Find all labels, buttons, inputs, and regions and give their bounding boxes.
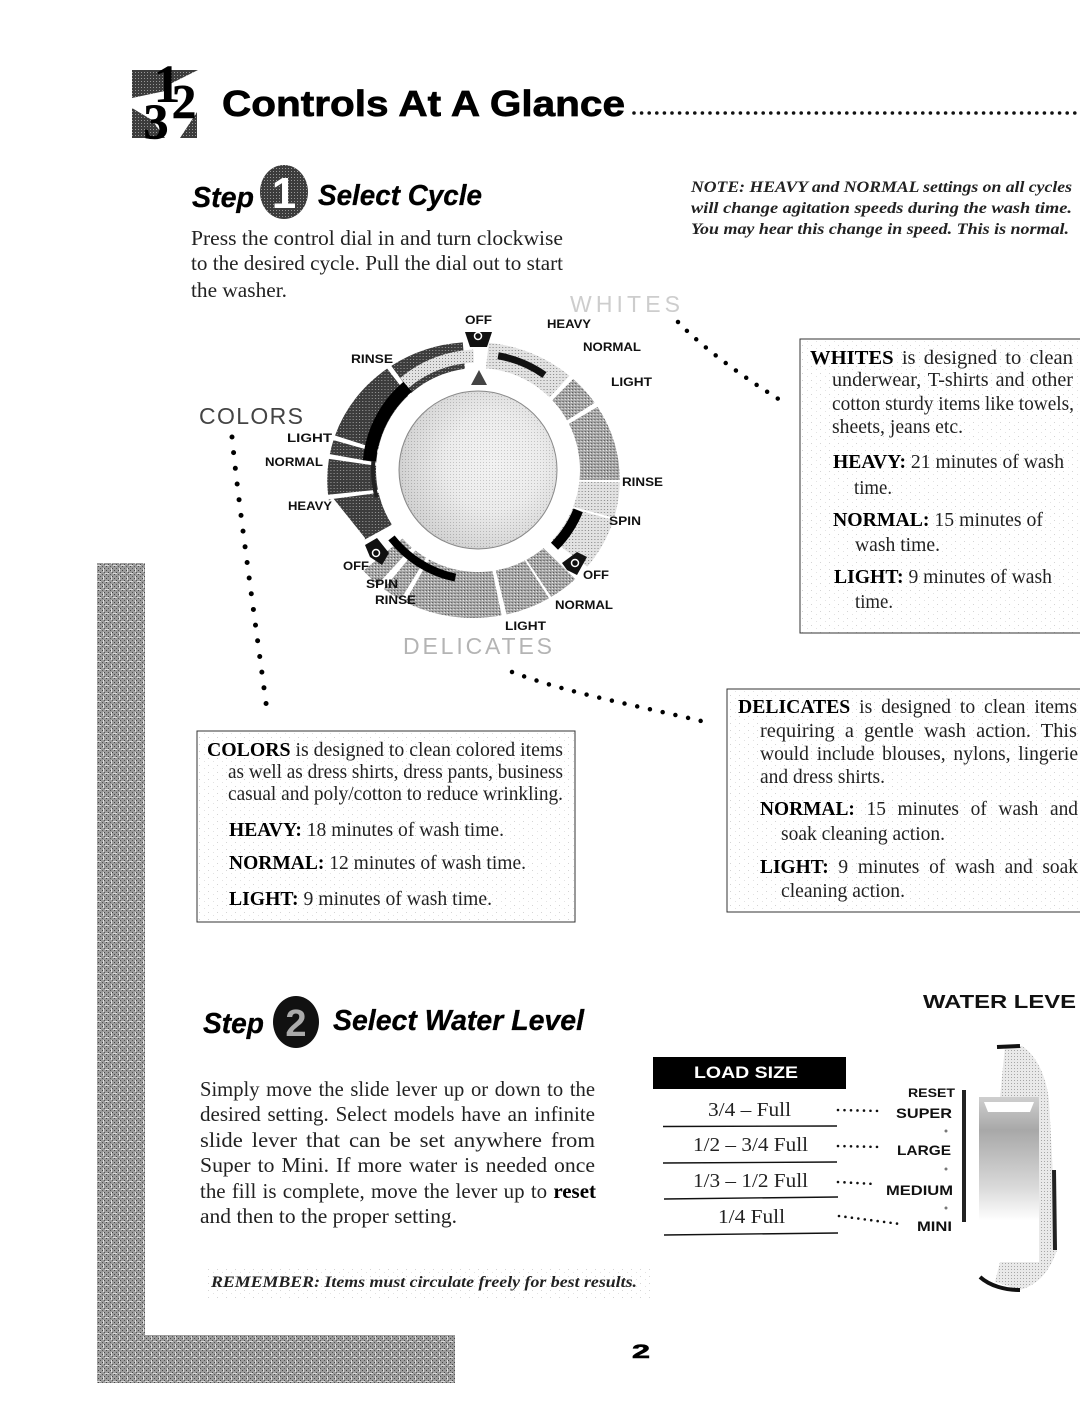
panel: whites: LIGHT: 9 minutes of wash (834, 566, 1052, 588)
dial labels: RINSE (351, 352, 393, 366)
water level settings: MEDIUM (886, 1182, 953, 1198)
dial: cycle control (310, 332, 594, 590)
panel: whites: wash time. (855, 534, 940, 556)
water level slider (964, 1046, 1057, 1290)
dial labels: LIGHT (611, 375, 653, 389)
panel: delicates: NORMAL: 15 minutes of wash and (760, 798, 1078, 820)
label: delicates: DELICATES (403, 633, 552, 659)
off marker left (365, 538, 389, 565)
note: heavy and normal settings: NOTE: HEAVY and NORMAL settings on all cycles (690, 179, 1072, 196)
heavy segment cut-away (310, 498, 365, 566)
panel: delicates: LIGHT: 9 minutes of wash and soak (760, 856, 1078, 878)
decorative noise behind reminder (205, 1266, 650, 1300)
heading: step 1 select cycle: Select Cycle (318, 180, 482, 212)
title dot leader (634, 111, 1080, 115)
step 2 instructions (200, 1077, 596, 1228)
icon: 1 2 3 numerals: 1 (154, 54, 180, 114)
off marker top (465, 332, 492, 347)
load size table (653, 1057, 846, 1235)
heading: step 1 select cycle: Step (192, 182, 254, 214)
panel: whites: time. (854, 477, 892, 499)
panel: delicates: and dress shirts. (760, 766, 885, 788)
dial labels (265, 313, 663, 633)
page number: 2 (632, 1342, 650, 1363)
step 1 instructions: Press the control dial in and turn clockwise (191, 226, 563, 250)
panel: whites (800, 339, 1080, 633)
note: heavy and normal settings (690, 179, 1072, 238)
load size dotted leaders (838, 1110, 900, 1224)
dial labels: SPIN (609, 514, 641, 528)
panel: colors (197, 731, 575, 922)
step 1 instructions: the washer. (191, 278, 287, 302)
inner shadow arcs (362, 354, 594, 586)
panel: delicates: would include blouses, nylons, lingerie (760, 743, 1078, 765)
note: heavy and normal settings: You may hear this change in speed. This is normal. (691, 221, 1069, 238)
dial labels: LIGHT (505, 619, 547, 633)
panel: colors: as well as dress shirts, dress pants, business (228, 761, 563, 783)
water level heading: WATER LEVE (923, 992, 1076, 1012)
step 2 instructions: slide lever that can be set anywhere from (200, 1128, 595, 1152)
pointer arrow (471, 370, 487, 385)
panel: delicates: cleaning action. (781, 880, 905, 902)
step 1 instructions: to the desired cycle. Pull the dial out to start (191, 251, 563, 275)
panel: colors: casual and poly/cotton to reduce wrinkling. (228, 783, 563, 805)
dial labels: HEAVY (288, 499, 332, 513)
panel: whites: WHITES is designed to clean (810, 347, 1073, 369)
dial labels: RINSE (622, 475, 663, 489)
title: Controls At A Glance (222, 83, 625, 124)
panel: colors: LIGHT: 9 minutes of wash time. (229, 888, 492, 910)
dial labels: HEAVY (547, 317, 591, 331)
dial labels: SPIN (366, 577, 398, 591)
panel: colors: COLORS is designed to clean colored items (207, 739, 563, 761)
panel: delicates: soak cleaning action. (781, 823, 945, 845)
decorative halftone sidebar (97, 563, 455, 1383)
panel: colors: HEAVY: 18 minutes of wash time. (229, 819, 504, 841)
reminder note: REMEMBER: Items must circulate freely for best results. (210, 1274, 637, 1291)
icon: 1 2 3 numerals (132, 54, 198, 149)
note: heavy and normal settings: will change agitation speeds during the wash time. (691, 200, 1072, 217)
load size table: 1/2 – 3/4 Full (693, 1134, 808, 1156)
water level settings: RESET (908, 1088, 955, 1100)
heading: step 1 select cycle: 1 (272, 169, 296, 218)
dial labels: NORMAL (583, 340, 641, 354)
dial labels: OFF (343, 559, 369, 573)
step 2 instructions: the fill is complete, move the lever up to reset (200, 1179, 596, 1203)
label: colors: COLORS (199, 403, 303, 429)
step 2 instructions: and then to the proper setting. (200, 1204, 457, 1228)
panel: whites: underwear, T-shirts and other (832, 369, 1073, 391)
dial labels: RINSE (375, 593, 416, 607)
heading: step 2 select water level: 2 (285, 1003, 307, 1045)
panel: whites: cotton sturdy items like towels, (832, 393, 1074, 415)
heading: step 2 select water level: Select Water Level (333, 1005, 585, 1037)
water level settings: LARGE (897, 1142, 951, 1158)
panel: whites: time. (855, 591, 893, 613)
load size table: 3/4 – Full (708, 1099, 791, 1121)
panel: delicates (727, 689, 1080, 912)
dotted leader: colors (232, 437, 268, 718)
panel: delicates: requiring a gentle wash action. This (760, 720, 1077, 742)
step 2 instructions: desired setting. Select models have an infinite (200, 1102, 595, 1126)
load size table: 1/3 – 1/2 Full (693, 1170, 808, 1192)
step 2 instructions: Simply move the slide lever up or down to the (200, 1077, 595, 1101)
panel: colors: NORMAL: 12 minutes of wash time. (229, 852, 526, 874)
label: whites: WHITES (570, 291, 680, 317)
dotted leader: delicates (512, 672, 705, 722)
dial labels: NORMAL (265, 455, 323, 469)
load size table: 1/4 Full (718, 1206, 785, 1228)
disc halftone (400, 392, 556, 548)
cycle segments (357, 370, 590, 590)
load size table: LOAD SIZE (694, 1063, 798, 1082)
icon: 1 2 3 numerals: 3 (144, 93, 168, 149)
white ring (376, 368, 580, 572)
dial labels: LIGHT (287, 431, 333, 445)
water level settings (886, 1088, 955, 1234)
water level settings: SUPER (896, 1105, 952, 1121)
off marker right (562, 552, 587, 575)
heading: step 2 select water level: Step (203, 1008, 264, 1040)
dotted leader: whites (678, 322, 780, 400)
icon: 1 2 3 numerals: 2 (172, 74, 196, 129)
panel: whites: NORMAL: 15 minutes of (833, 509, 1043, 531)
dial labels: OFF (465, 313, 492, 327)
water level settings: MINI (917, 1218, 952, 1234)
panel: delicates: DELICATES is designed to clean items (738, 696, 1077, 718)
dial labels: NORMAL (555, 598, 613, 612)
heading: step 2 select water level (203, 996, 585, 1048)
dial labels: OFF (583, 568, 609, 582)
inner disc (399, 391, 557, 549)
heading: step 1 select cycle (192, 165, 482, 219)
panel: whites: HEAVY: 21 minutes of wash (833, 451, 1064, 473)
step 1 instructions (191, 226, 563, 302)
step 2 instructions: Super to Mini. If more water is needed once (200, 1153, 595, 1177)
panel: whites: sheets, jeans etc. (832, 416, 963, 438)
